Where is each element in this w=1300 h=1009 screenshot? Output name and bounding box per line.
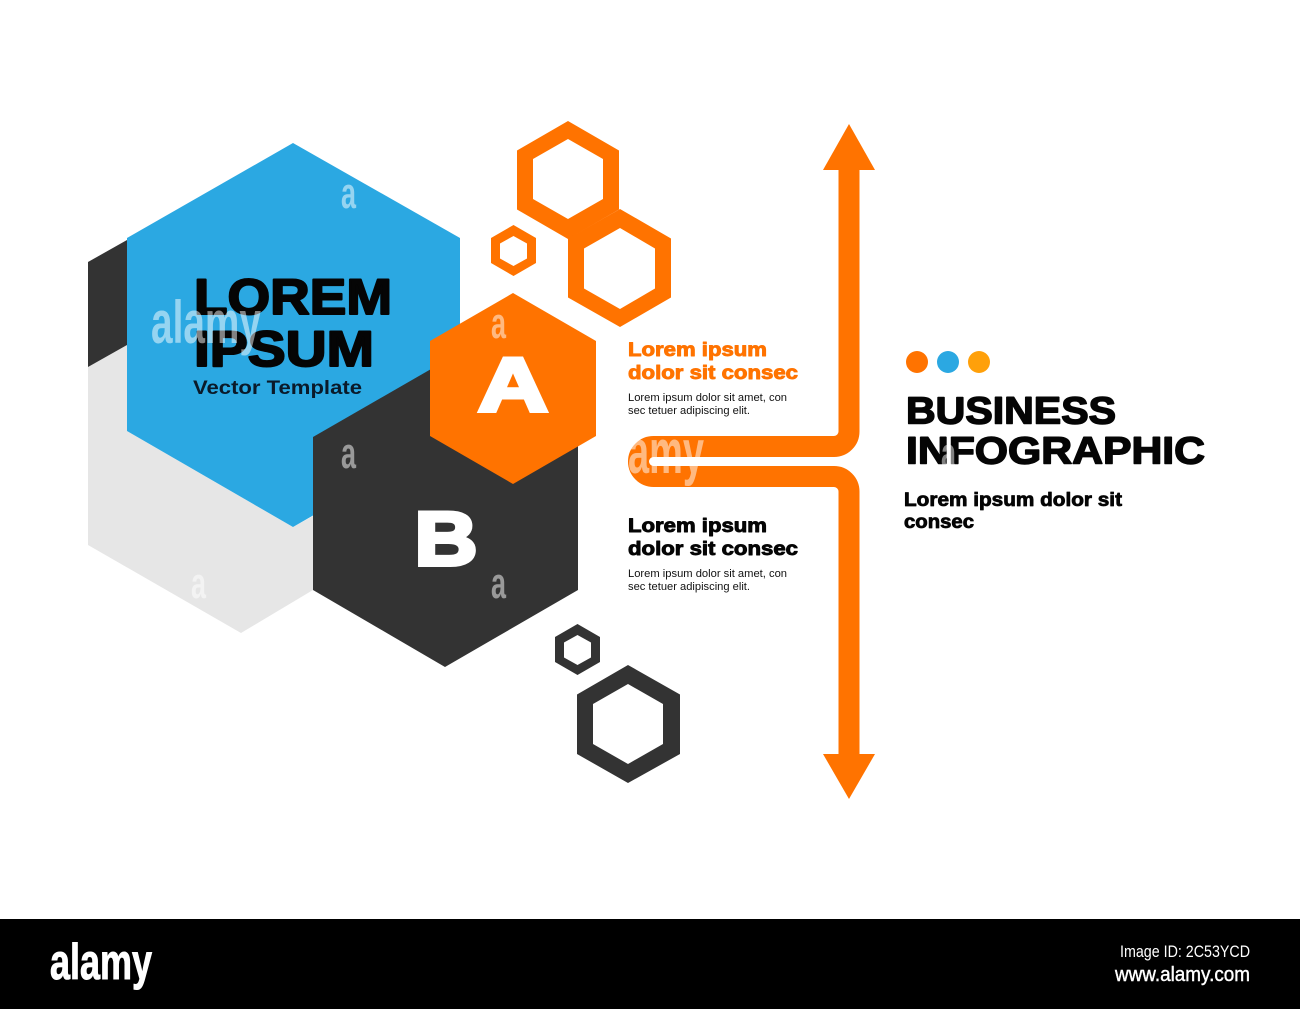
text block: A: dolor sit consec: [628, 363, 799, 384]
title: Lorem Ipsum Vector Template: Vector Template: [193, 378, 362, 399]
text block: B: dolor sit consec: [628, 539, 799, 560]
watermarks: amy: [628, 418, 704, 487]
footer bar: alamy: [50, 934, 152, 990]
footer bar: [0, 919, 1300, 1009]
hexagon: A orange: A: [478, 343, 548, 428]
subheading: consec: [904, 512, 974, 533]
heading: Business Infographic: BUSINESS: [906, 390, 1116, 432]
text block: A: Lorem ipsum dolor sit amet, con: [628, 392, 787, 404]
title: Lorem Ipsum Vector Template: [193, 269, 392, 399]
watermarks: alamy: [151, 289, 261, 356]
subheading: Lorem ipsum dolor sit: [904, 490, 1123, 511]
heading: Business Infographic: [906, 390, 1205, 472]
watermarks: a: [491, 559, 506, 608]
text block: B: Lorem ipsum dolor sit amet, con: [628, 568, 787, 580]
footer bar: Image ID: 2C53YCD: [1120, 942, 1250, 961]
watermarks: a: [941, 429, 956, 478]
text block: B: Lorem ipsum: [628, 516, 767, 537]
watermarks: a: [341, 169, 356, 218]
hexagon: back grey and dark: [88, 240, 313, 633]
hexagon: B dark: [313, 361, 578, 667]
icon: orange outlined hexagons: [491, 121, 671, 327]
hexagon: A orange: [430, 293, 596, 484]
text block: B: sec tetuer adipiscing elit.: [628, 581, 750, 593]
text block: A: Lorem ipsum: [628, 340, 767, 361]
subheading: [904, 490, 1123, 533]
text block: A: [628, 340, 799, 417]
icon: dark outlined hexagons: [555, 624, 680, 783]
text block: B: [628, 516, 799, 593]
heading: Business Infographic: INFOGRAPHIC: [906, 430, 1205, 472]
hexagon: B dark: B: [414, 497, 478, 582]
watermarks: a: [191, 559, 206, 608]
watermarks: a: [491, 299, 506, 348]
icon: three coloured dots: [906, 351, 990, 373]
title: Lorem Ipsum Vector Template: IPSUM: [194, 321, 374, 377]
text block: A: sec tetuer adipiscing elit.: [628, 405, 750, 417]
arrow: double-headed orange connector: [639, 124, 875, 799]
hexagon: blue title: [127, 143, 460, 527]
title: Lorem Ipsum Vector Template: LOREM: [194, 269, 392, 325]
watermarks: a: [341, 429, 356, 478]
footer bar: www.alamy.com: [1114, 964, 1250, 986]
watermarks: [151, 169, 956, 608]
